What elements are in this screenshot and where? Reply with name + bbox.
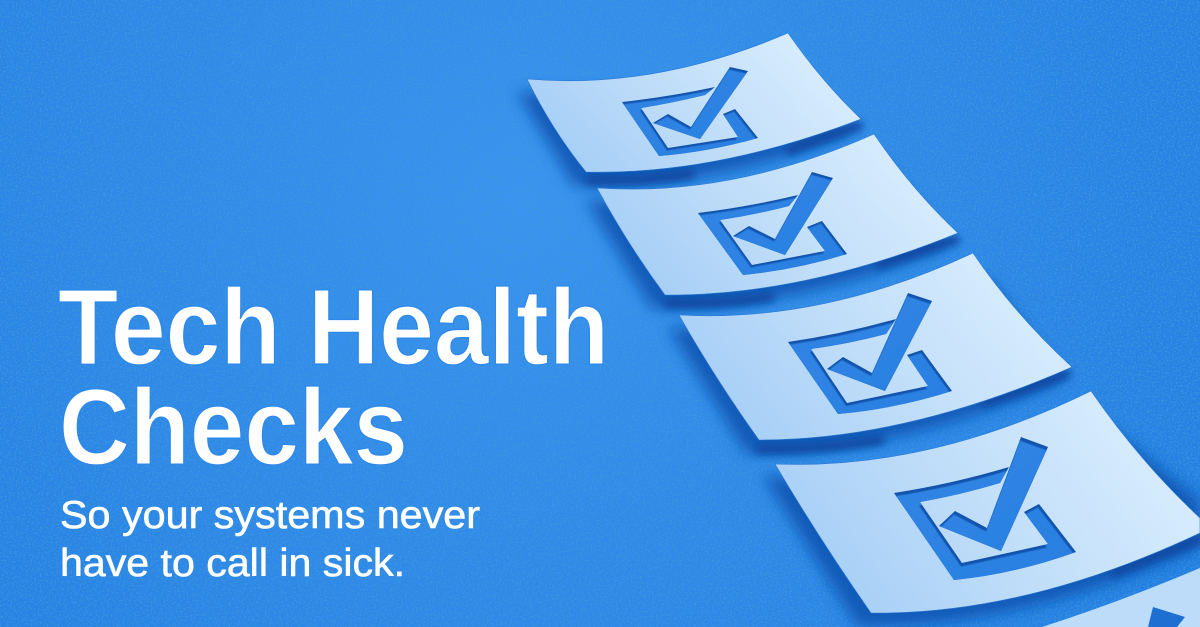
title: Tech Health — [58, 266, 609, 387]
icon: checkbox with check mark 2 — [698, 172, 847, 275]
card 4 — [775, 391, 1200, 613]
icon: checkbox with check mark 1 — [622, 67, 758, 156]
subtitle: have to call in sick. — [60, 542, 405, 585]
subtitle — [60, 494, 480, 585]
card shadows — [517, 60, 1200, 627]
paper 1 — [527, 33, 861, 172]
paper 2 — [597, 134, 958, 295]
card 1 — [527, 33, 861, 172]
paper 4 — [775, 391, 1200, 613]
paper 3 — [679, 253, 1072, 440]
paper 5 — [1042, 568, 1200, 627]
card 3 — [679, 253, 1072, 440]
icon: checkbox with check mark 4 — [894, 437, 1076, 580]
title — [58, 266, 609, 487]
card 2 — [597, 134, 958, 295]
icon: checkbox with check mark 3 — [788, 293, 952, 414]
icon: check mark 5 — [1148, 607, 1185, 627]
card 5 partially visible — [1042, 568, 1200, 627]
title: Checks — [59, 366, 408, 487]
subtitle: So your systems never — [60, 494, 480, 537]
